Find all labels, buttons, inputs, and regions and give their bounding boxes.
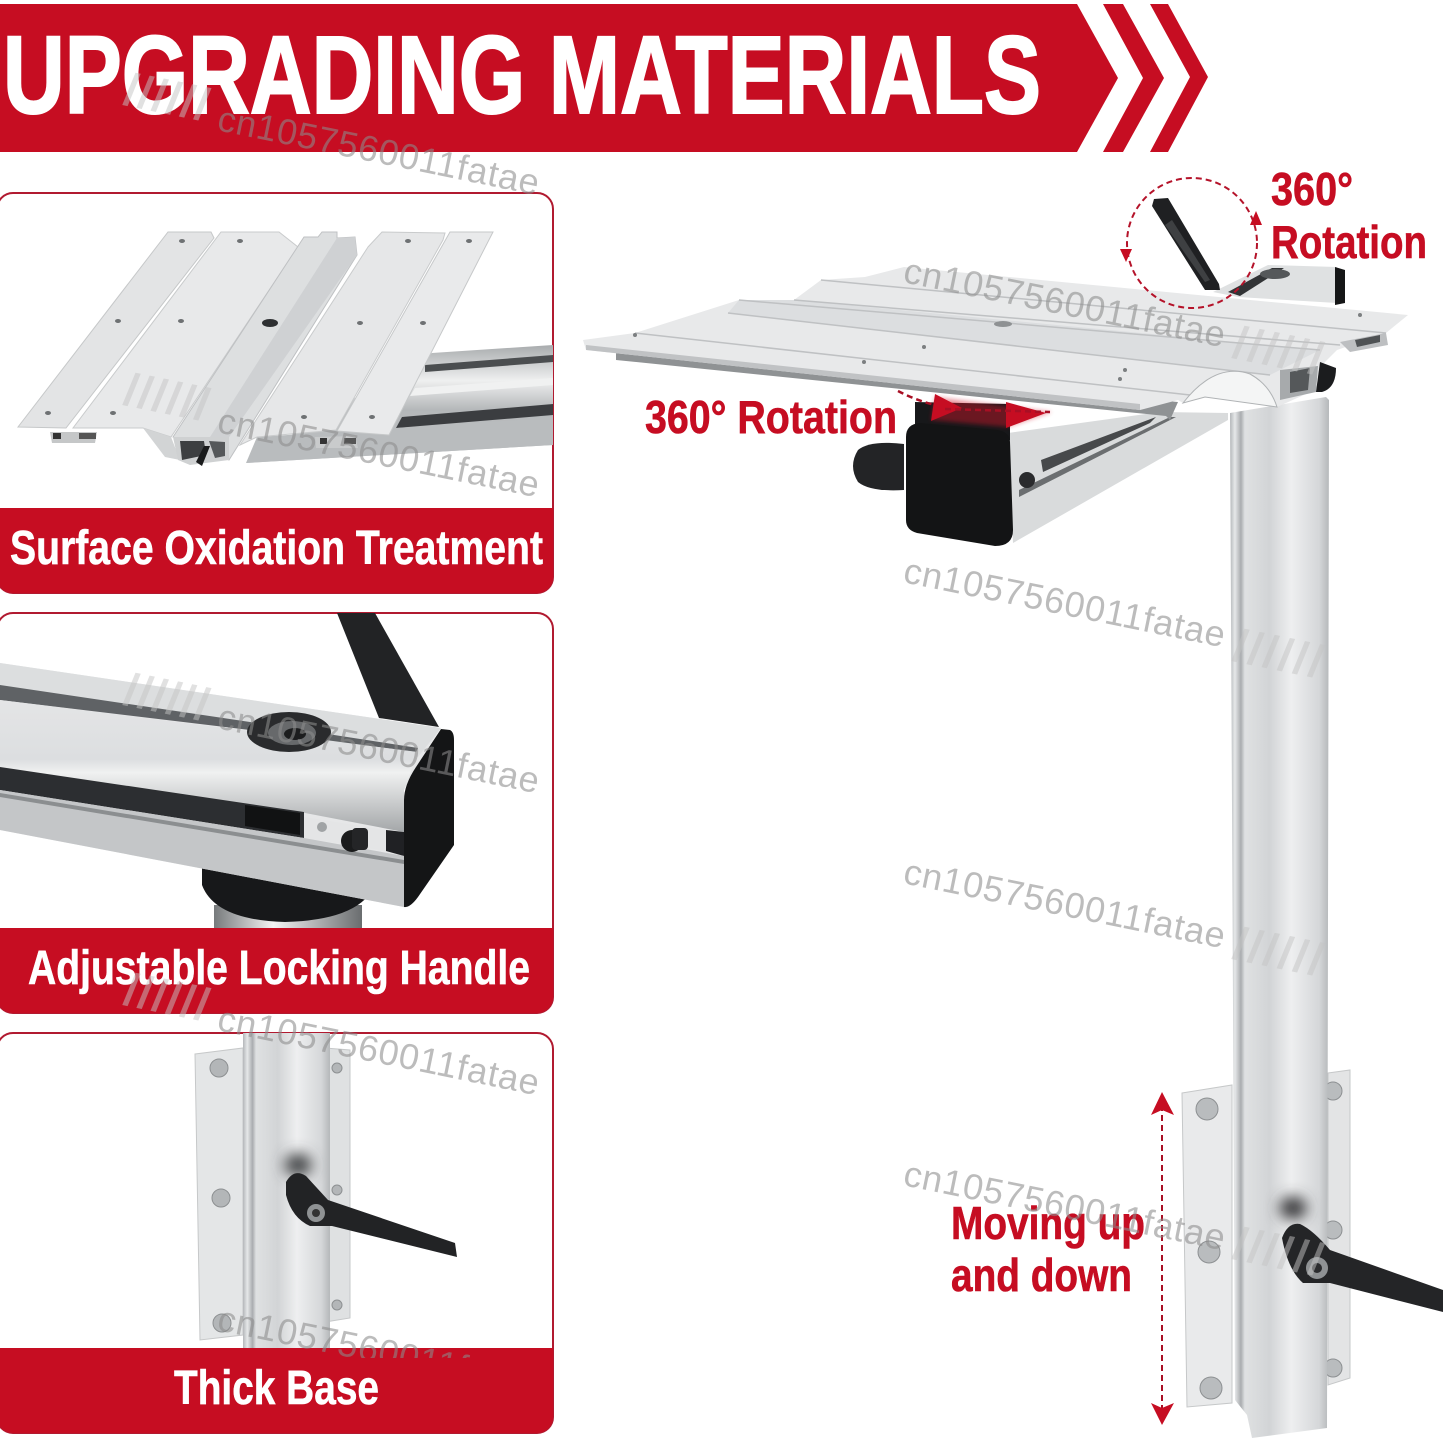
watermarks: ////// (1229, 917, 1328, 986)
watermarks: cn1057560011fatae (214, 98, 543, 203)
icon: rotation arrows (898, 391, 1052, 428)
caption band (0, 508, 553, 593)
icon: dashed rotation circle (1127, 178, 1257, 308)
callout: 360 rotation plate: 360° Rotation (645, 391, 897, 443)
panel: surface oxidation treatment (0, 193, 553, 593)
watermarks: cn1057560011fatae (900, 250, 1229, 355)
watermarks: ////// (120, 963, 214, 1031)
watermarks (120, 63, 1328, 1403)
photo: rail with handle (0, 613, 454, 935)
end cap and knob (915, 402, 1010, 440)
callout: moving up and down (951, 1092, 1174, 1425)
watermarks: cn1057560011fatae (900, 851, 1229, 956)
watermarks: ////// (120, 363, 214, 431)
caption band (0, 928, 553, 1013)
main product photo: table mount (583, 198, 1443, 1438)
callout: moving up and down: and down (951, 1249, 1132, 1301)
photo: base bracket with handle (195, 1033, 457, 1363)
watermarks: cn1057560011fatae (900, 1153, 1229, 1258)
top plate (583, 267, 1408, 410)
lower handle (1279, 1196, 1307, 1220)
caption: Thick Base (174, 1362, 379, 1415)
watermarks: ////// (1229, 316, 1328, 385)
lower lip of plate (616, 349, 1178, 420)
watermarks: cn1057560011fatae (214, 400, 543, 505)
panel: adjustable locking handle (0, 613, 553, 1013)
callout: 360 rotation handle: 360° (1271, 163, 1353, 215)
watermarks: ////// (1229, 1217, 1328, 1286)
extrusion profiles (50, 432, 97, 443)
watermarks: cn1057560011fatae (214, 696, 543, 801)
header banner (0, 4, 1208, 152)
watermarks: ////// (1229, 619, 1328, 688)
upright pole (1230, 397, 1329, 1438)
profile end sections (1183, 371, 1277, 407)
watermarks: ////// (120, 63, 214, 131)
bottom brackets (1182, 1085, 1232, 1407)
watermarks: cn1057560011fatae (214, 998, 543, 1103)
strips (18, 232, 214, 428)
watermarks: cn1057560011fatae (214, 1298, 543, 1403)
rear clamp and top handle (1213, 265, 1337, 303)
photo: mounting plate and rail (18, 232, 553, 466)
callout: 360 rotation handle (1120, 163, 1427, 308)
caption: Adjustable Locking Handle (28, 942, 530, 995)
holes (45, 239, 472, 419)
callout: moving up and down: Moving up (951, 1197, 1145, 1249)
horizontal rail (1008, 412, 1228, 543)
panel: thick base (0, 1033, 553, 1433)
watermarks: cn1057560011fatae (900, 550, 1229, 655)
caption band (0, 1348, 553, 1433)
title: UPGRADING MATERIALS (3, 14, 1041, 137)
watermarks: ////// (120, 663, 214, 731)
arrow: vertical double arrow (1151, 1092, 1174, 1425)
caption: Surface Oxidation Treatment (10, 522, 543, 575)
